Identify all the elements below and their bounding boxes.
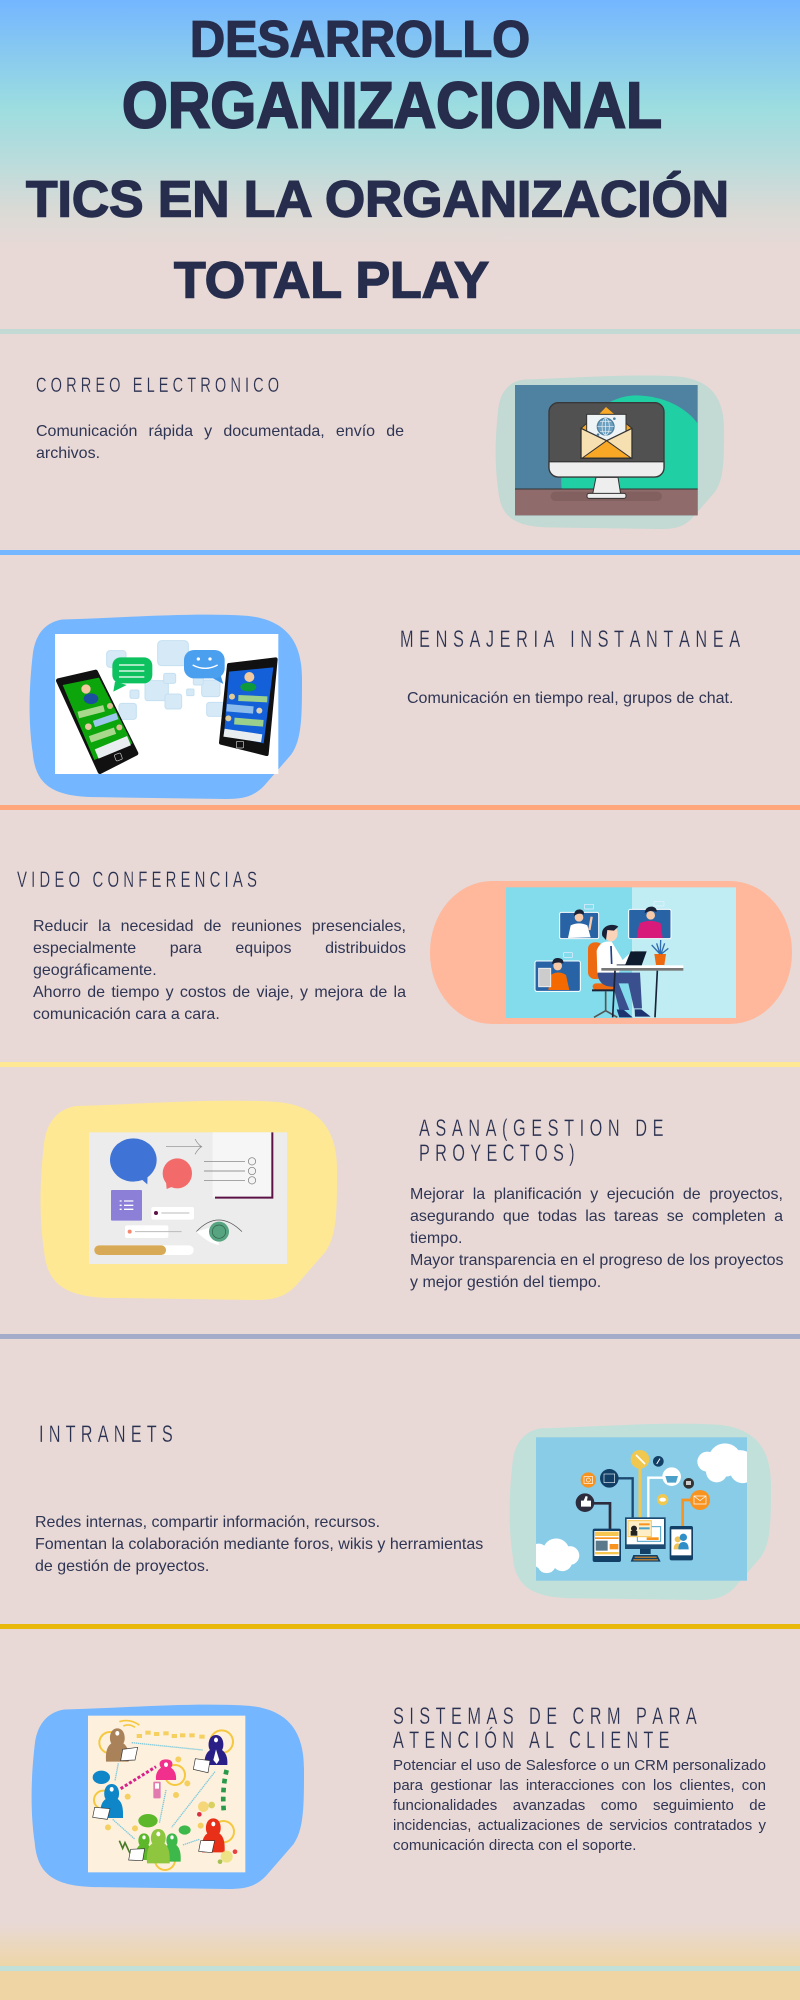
text: video conferencias description: Reducir la necesidad de reuniones presenciales, xyxy=(33,918,406,934)
subtitle: TICs en la organización: TICS EN LA ORGANIZACIÓN xyxy=(26,170,729,228)
text: intranets description: de gestión de proyectos. xyxy=(35,1558,209,1574)
icon: two smartphones chatting xyxy=(30,614,302,799)
text: crm description: para gestionar las interacciones con los clientes, con xyxy=(393,1777,766,1794)
text: intranets description xyxy=(35,1514,483,1574)
heading: mensajeria instantanea: MENSAJERIA INSTANTANEA xyxy=(400,626,746,653)
heading: sistemas de crm para atencion al cliente: ATENCIÓN AL CLIENTE xyxy=(393,1727,675,1754)
panel: asana gestion de proyectos xyxy=(40,1100,784,1300)
text: mensajeria instantanea description: Comunicación en tiempo real, grupos de chat. xyxy=(407,690,733,706)
text: video conferencias description: especialmente para equipos distribuidos xyxy=(33,940,406,956)
text: crm description: comunicación directa con el soporte. xyxy=(393,1837,636,1854)
text: asana description xyxy=(410,1186,784,1290)
panel: correo electronico xyxy=(36,372,724,529)
text: video conferencias description: Ahorro de tiempo y costos de viaje, y mejora de la xyxy=(33,984,406,1000)
panel: video conferencias xyxy=(17,867,792,1024)
text: correo electronico description: Comunicación rápida y documentada, envío de xyxy=(36,423,404,440)
text: asana description: y mejor gestión del tiempo. xyxy=(410,1274,601,1290)
title line: Organizacional: ORGANIZACIONAL xyxy=(122,68,662,142)
text: crm description: funcionalidades avanzadas como seguimiento de xyxy=(393,1797,766,1814)
text: crm description: Potenciar el uso de Salesforce o un CRM personalizado xyxy=(393,1757,766,1774)
text: video conferencias description xyxy=(33,918,406,1022)
text: video conferencias description: geográficamente. xyxy=(33,962,157,978)
title line: Desarrollo: DESARROLLO xyxy=(190,10,530,68)
icon: email on desktop monitor xyxy=(496,376,724,529)
icon: project management board xyxy=(40,1100,337,1300)
heading: sistemas de crm para atencion al cliente xyxy=(393,1703,702,1754)
subtitle: Total Play: TOTAL PLAY xyxy=(174,252,489,308)
text: asana description: asegurando que todas las tareas se completen a xyxy=(410,1208,783,1224)
text: intranets description: Fomentan la colaboración mediante foros, wikis y herramientas xyxy=(35,1536,483,1552)
heading: asana gestion de proyectos: ASANA(GESTION DE xyxy=(419,1115,669,1142)
heading: correo electronico: CORREO ELECTRONICO xyxy=(36,372,283,397)
text: correo electronico description: archivos. xyxy=(36,445,100,462)
text: asana description: Mayor transparencia en el progreso de los proyectos xyxy=(410,1252,784,1268)
icon: connected devices network xyxy=(510,1424,771,1600)
panel: intranets xyxy=(35,1421,771,1600)
title xyxy=(26,10,729,308)
heading: asana gestion de proyectos: PROYECTOS) xyxy=(419,1140,580,1167)
text: intranets description: Redes internas, compartir información, recursos. xyxy=(35,1514,380,1530)
heading: intranets: INTRANETS xyxy=(39,1421,178,1448)
heading: asana gestion de proyectos xyxy=(419,1115,669,1167)
text: crm description xyxy=(393,1757,766,1854)
text: video conferencias description: comunicación cara a cara. xyxy=(33,1006,220,1022)
panel: mensajeria instantanea xyxy=(30,614,746,799)
text: crm description: incidencias, actualizaciones de servicios contratados y xyxy=(393,1817,766,1834)
icon: man in video conference xyxy=(430,881,792,1024)
text: asana description: Mejorar la planificación y ejecución de proyectos, xyxy=(410,1186,783,1202)
heading: sistemas de crm para atencion al cliente: SISTEMAS DE CRM PARA xyxy=(393,1703,702,1730)
text: correo electronico description xyxy=(36,423,404,462)
panel: sistemas de crm xyxy=(32,1703,766,1889)
heading: video conferencias: VIDEO CONFERENCIAS xyxy=(17,867,261,892)
icon: customer relationship network xyxy=(32,1704,304,1889)
text: asana description: tiempo. xyxy=(410,1230,462,1246)
